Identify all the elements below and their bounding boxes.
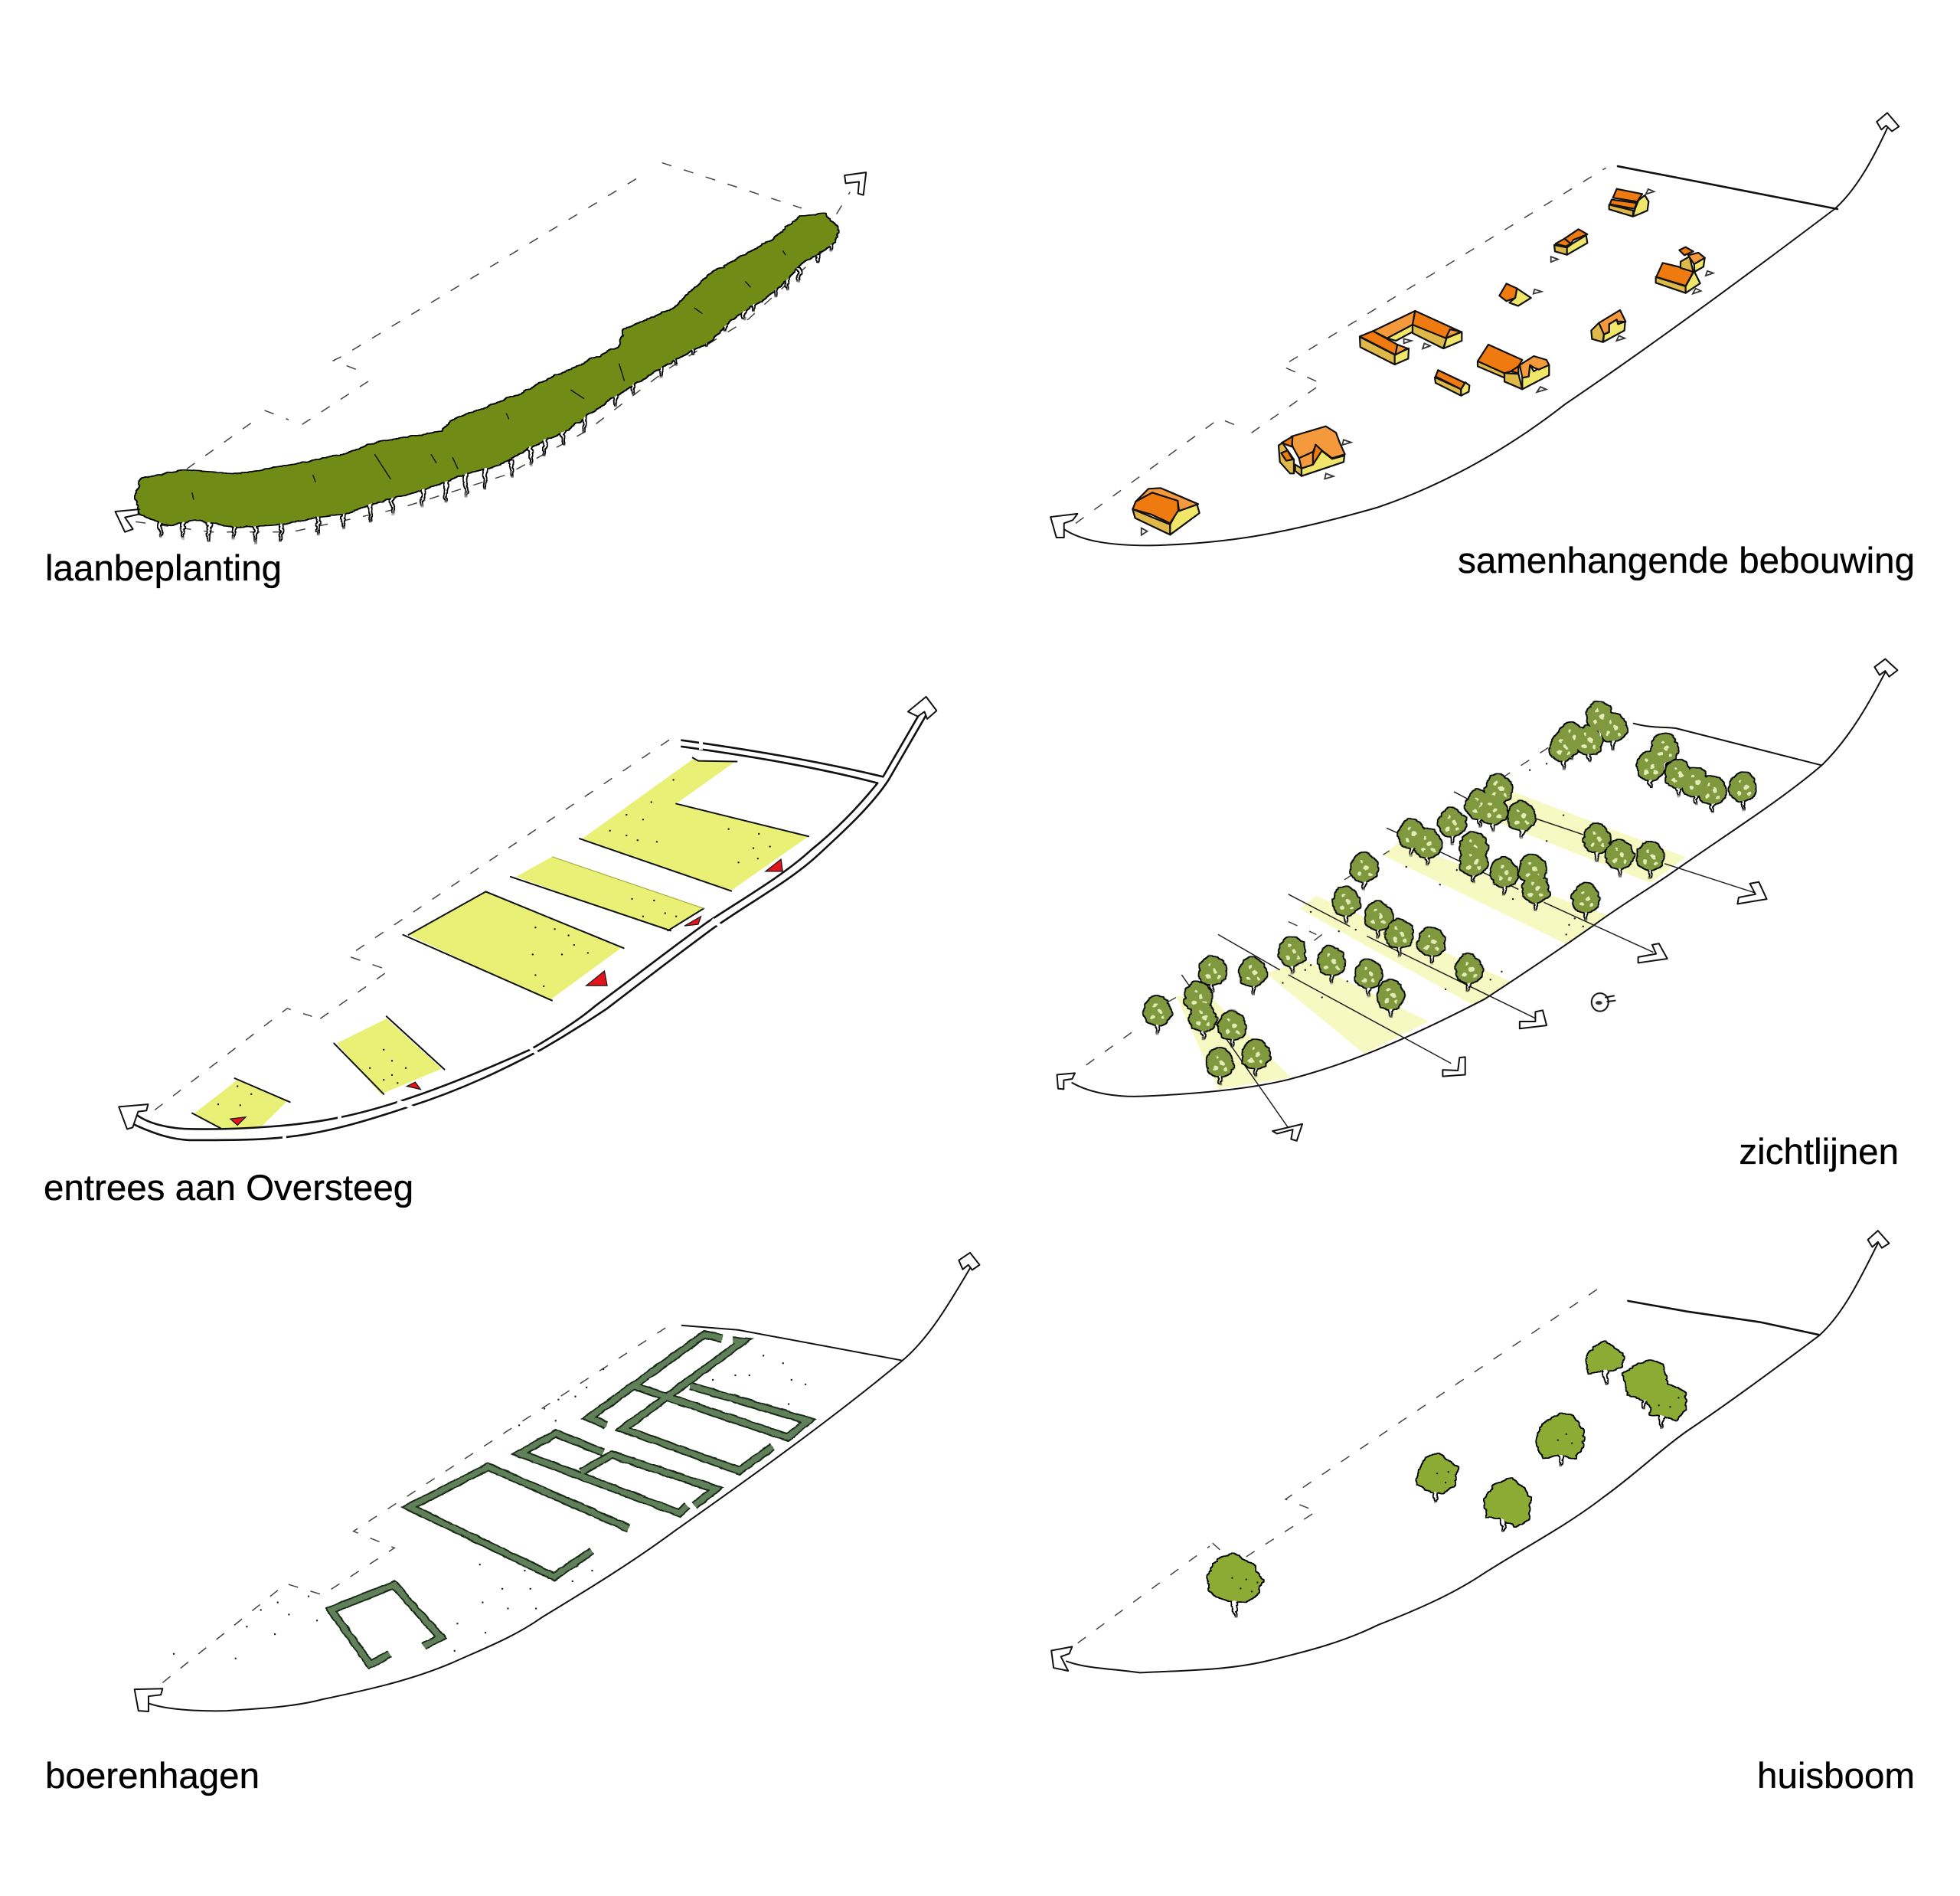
top boundary xyxy=(1618,166,1838,209)
label: boerenhagen xyxy=(45,1756,260,1796)
label: huisboom xyxy=(1757,1756,1915,1796)
house trees xyxy=(1208,1342,1686,1617)
arrow: south-west xyxy=(1051,1646,1072,1671)
field 1 xyxy=(580,757,808,891)
building 8 xyxy=(1499,283,1531,306)
top boundary xyxy=(682,1326,901,1360)
entrance triangles xyxy=(230,859,782,1125)
entrance markers xyxy=(1142,189,1713,535)
site outline dashed xyxy=(1078,1290,1597,1643)
site outline dashed xyxy=(1076,168,1606,523)
panel: huisboom xyxy=(1051,1231,1915,1796)
label: zichtlijnen xyxy=(1739,1132,1899,1172)
hedges xyxy=(331,1335,808,1665)
arrow: north-east xyxy=(844,172,866,195)
panel: samenhangende bebouwing xyxy=(1050,113,1915,581)
panel: laanbeplanting xyxy=(45,163,866,589)
band stipple xyxy=(1282,763,1583,997)
top boundary xyxy=(1634,724,1821,765)
panel: zichtlijnen xyxy=(1057,659,1899,1172)
top boundary xyxy=(1628,1301,1819,1335)
buildings 6, 7, 9 and 10 xyxy=(1554,189,1705,342)
arrow: north-east xyxy=(908,697,936,719)
field 5 xyxy=(192,1078,290,1129)
arrow: south-west xyxy=(1050,514,1077,538)
arrow: south-west xyxy=(119,1104,148,1129)
arrow: south-west xyxy=(116,509,139,532)
stipple xyxy=(174,1355,805,1659)
arrow: south-west xyxy=(135,1688,162,1711)
site outline dashed xyxy=(136,163,850,532)
label: laanbeplanting xyxy=(45,548,282,589)
field 2 xyxy=(511,857,704,930)
label: samenhangende bebouwing xyxy=(1458,541,1915,581)
site outline dashed xyxy=(162,1326,668,1682)
road xyxy=(127,710,927,1140)
site outline dashed xyxy=(155,737,674,1110)
arrow: north-east xyxy=(959,1253,979,1270)
site outline dashed xyxy=(1086,727,1580,1065)
field stipple xyxy=(218,780,770,1105)
arrow: north-east xyxy=(1868,1231,1889,1248)
icon: eye xyxy=(1592,993,1615,1012)
road breaks xyxy=(284,739,720,1140)
panel: boerenhagen xyxy=(45,1253,979,1796)
view bands xyxy=(1176,789,1686,1089)
field 3 xyxy=(403,891,624,1001)
road curve xyxy=(143,1267,971,1711)
sight lines xyxy=(1181,792,1754,1128)
road curve xyxy=(1072,670,1886,1097)
road curve xyxy=(1067,1244,1878,1672)
canopy divisions xyxy=(192,250,786,500)
tree band with trunks xyxy=(136,214,838,544)
field 4 xyxy=(334,1016,444,1094)
road curve xyxy=(1058,128,1887,545)
sight arrows xyxy=(1272,882,1767,1141)
orchard trees xyxy=(1144,701,1756,1085)
arrow: north-east xyxy=(1874,659,1897,677)
panel: entrees aan Oversteeg xyxy=(44,697,936,1208)
arrow: north-east xyxy=(1877,113,1899,131)
buildings 3 to 5 xyxy=(1360,311,1549,396)
buildings 1 and 2 xyxy=(1132,427,1345,534)
label: entrees aan Oversteeg xyxy=(44,1168,413,1208)
arrow: south-west xyxy=(1057,1073,1075,1089)
tree stipple xyxy=(1232,1397,1678,1591)
